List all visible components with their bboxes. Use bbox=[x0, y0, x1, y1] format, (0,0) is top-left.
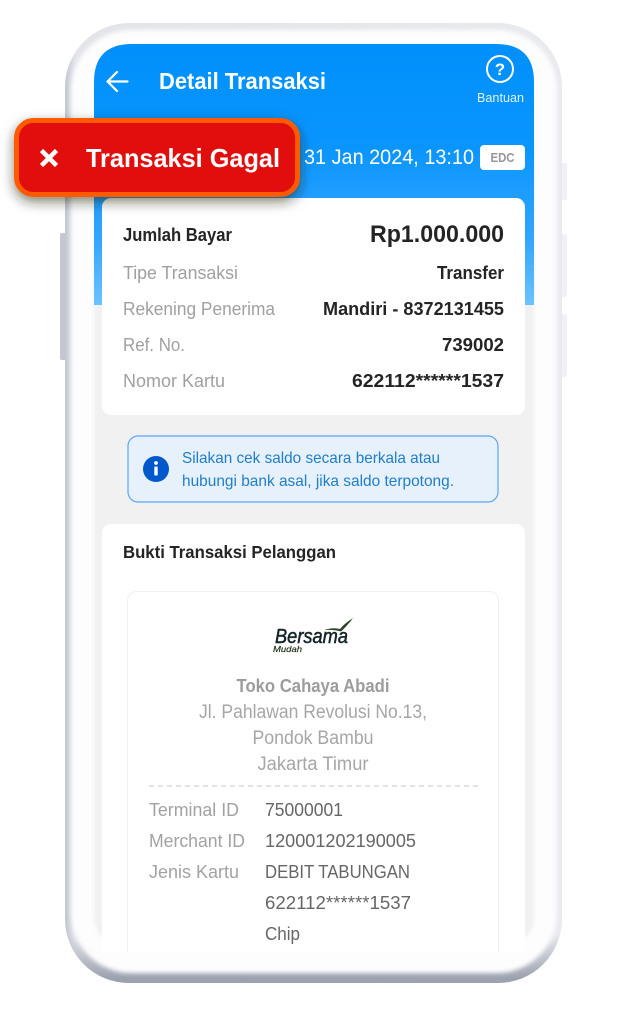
phone body bbox=[65, 23, 562, 983]
merchant name: Toko Cahaya Abadi bbox=[236, 676, 390, 696]
amount value: Rp1.000.000 bbox=[370, 221, 504, 248]
panel: payment details bbox=[102, 198, 525, 415]
callout: balance notice bbox=[128, 436, 498, 502]
phone side buttons bbox=[60, 163, 567, 377]
logo: Bersama Mudah: Bersama bbox=[275, 626, 348, 648]
merchant address: Jl. Pahlawan Revolusi No.13, bbox=[199, 702, 427, 723]
merchant id row: 120001202190005 bbox=[265, 831, 416, 851]
EDC tag bbox=[480, 145, 525, 170]
card number row bbox=[123, 371, 504, 391]
notice text: Silakan cek saldo secara berkala atau bbox=[182, 450, 440, 467]
page title: Detail Transaksi bbox=[159, 68, 326, 94]
merchant address: Jakarta Timur bbox=[258, 754, 369, 775]
merchant id row: Merchant ID bbox=[149, 831, 245, 851]
card type row: Chip bbox=[265, 924, 300, 944]
status badge: failed transaction bbox=[16, 120, 298, 194]
icon: info bbox=[143, 456, 169, 482]
transaction date: 31 Jan 2024, 13:10 bbox=[304, 146, 474, 169]
phone screen bbox=[94, 44, 534, 944]
logo: Bersama Mudah bbox=[273, 618, 353, 654]
transaction type row bbox=[123, 263, 504, 283]
terminal id row: Terminal ID bbox=[149, 800, 239, 820]
terminal id row bbox=[149, 802, 342, 816]
transaction type row: Transfer bbox=[437, 263, 504, 283]
badge label: Transaksi Gagal bbox=[86, 143, 280, 173]
EDC tag: EDC bbox=[490, 150, 515, 165]
recipient account row: Rekening Penerima bbox=[123, 299, 276, 319]
reference number row bbox=[123, 335, 504, 355]
icon: back arrow bbox=[108, 72, 128, 91]
card number row: Nomor Kartu bbox=[123, 371, 225, 391]
card type row bbox=[149, 862, 411, 944]
recipient account row bbox=[123, 299, 504, 319]
icon: question mark: ? bbox=[495, 60, 505, 79]
callout: balance notice: hubungi bank asal, jika saldo terpotong. bbox=[182, 473, 454, 490]
icon: cross bbox=[42, 150, 56, 166]
blue header background bbox=[94, 44, 534, 305]
panel: customer receipt bbox=[102, 524, 525, 992]
card number row: 622112******1537 bbox=[352, 371, 504, 391]
amount label: Jumlah Bayar bbox=[123, 225, 232, 245]
logo: Bersama Mudah: Mudah bbox=[273, 644, 302, 654]
receipt card bbox=[128, 592, 498, 992]
terminal id row: 75000001 bbox=[265, 800, 343, 820]
reference number row: Ref. No. bbox=[123, 335, 185, 355]
recipient account row: Mandiri - 8372131455 bbox=[323, 299, 504, 319]
card type row: 622112******1537 bbox=[265, 893, 411, 913]
icon: bird swoosh bbox=[324, 618, 353, 632]
help button bbox=[477, 56, 524, 105]
receipt heading: Bukti Transaksi Pelanggan bbox=[123, 542, 336, 562]
merchant address bbox=[199, 704, 426, 770]
merchant id row bbox=[150, 834, 416, 847]
card type row: DEBIT TABUNGAN bbox=[265, 862, 410, 882]
merchant address: Pondok Bambu bbox=[252, 728, 374, 749]
transaction type row: Tipe Transaksi bbox=[123, 263, 238, 283]
card type row: Jenis Kartu bbox=[149, 862, 239, 882]
help label: Bantuan bbox=[477, 90, 524, 105]
reference number row: 739002 bbox=[442, 335, 504, 355]
